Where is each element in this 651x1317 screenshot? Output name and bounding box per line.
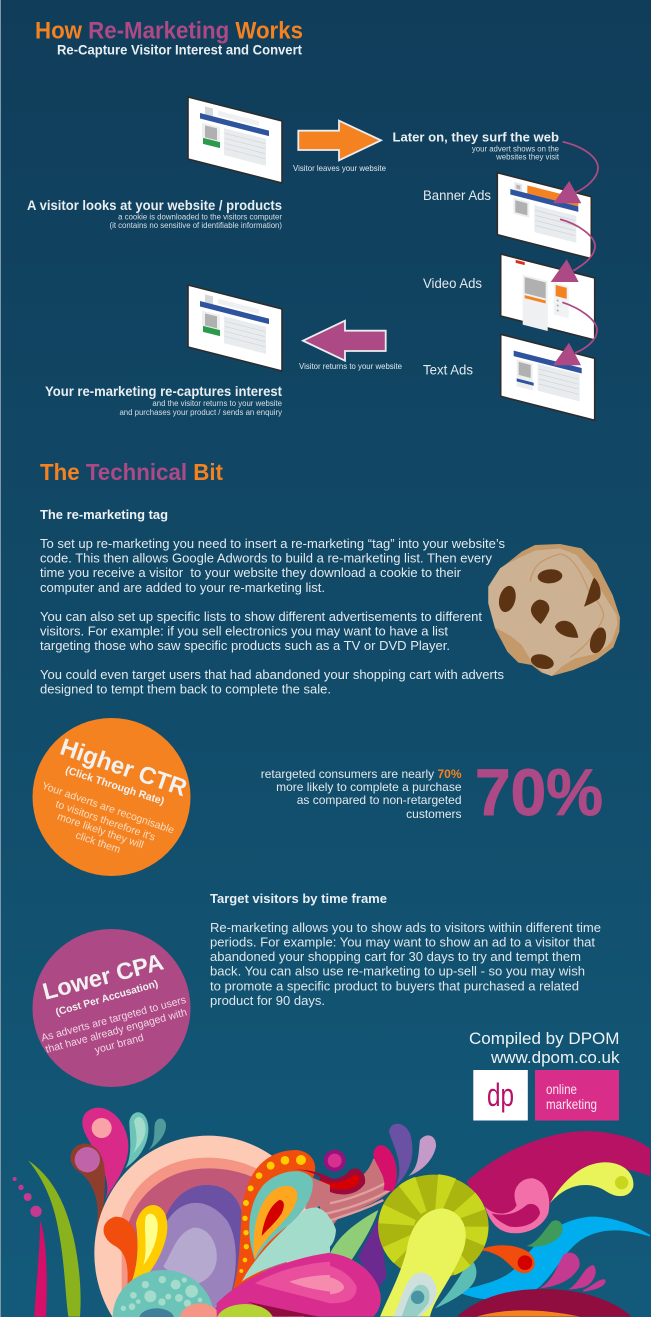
connector curves and pointers [551, 142, 598, 365]
panel: recapture [45, 261, 402, 417]
browser window: video ads [501, 230, 595, 364]
caption: recaptures interest: and the visitor returns to your website [152, 399, 282, 408]
badge: higher CTR: (Click Through Rate) [64, 764, 166, 808]
caption: visitor looks: A visitor looks at your website / products [27, 198, 282, 213]
badge: higher CTR [32, 718, 190, 876]
browser window: return visit [188, 261, 282, 395]
text block: time frame explanation: abandoned your shopping cart for 30 days to try and tempt them [210, 950, 581, 964]
illustration: colourful swirls [13, 1108, 650, 1317]
credit: www.dpom.co.uk [490, 1048, 620, 1067]
text block: re-marketing tag explanation: designed to tempt them back to complete the sale. [40, 683, 331, 697]
text block: re-marketing tag explanation: visitors. For example: if you sell electronics you may want to have a list [40, 625, 449, 639]
credit [469, 1029, 620, 1067]
badge: higher CTR: Higher CTR [57, 734, 190, 802]
badge: higher CTR: to visitors therefore it's [54, 798, 157, 844]
sub text: adverts shown [472, 145, 560, 162]
text block: re-marketing tag explanation: targeting those who saw specific products such as a TV or DVD Player. [40, 639, 450, 653]
badge: lower CPA: (Cost Per Accusation) [55, 979, 159, 1018]
text block: time frame explanation: to promote a specific product to buyers that purchased a related [210, 980, 579, 994]
badge: lower CPA: Lower CPA [40, 949, 166, 1005]
swirls: left side [13, 1108, 330, 1317]
stat number: 70%: 70% [475, 755, 603, 829]
text block: time frame explanation: periods. For example: You may want to show an ad to a visitor that [210, 936, 596, 950]
text block: re-marketing tag explanation: To set up re-marketing you need to insert a re-marketing “tag” into your website’s [40, 537, 505, 551]
caption: recaptures interest: Your re-marketing re-captures interest [45, 384, 282, 399]
badge: higher CTR: Your adverts are recognisable [40, 780, 176, 837]
text block: re-marketing tag explanation [40, 537, 505, 697]
label: visitor returns: Visitor returns to your website [299, 361, 402, 371]
stat text: 70 percent: retargeted consumers are nearly 70% [261, 767, 462, 781]
logo: dp online marketing: dp [487, 1077, 514, 1113]
label: text ads: Text Ads [423, 362, 473, 378]
logo: dp online marketing: online [546, 1081, 577, 1097]
subtitle: Re-Capture Visitor Interest and Convert [57, 42, 302, 58]
logo: dp online marketing: marketing [546, 1096, 597, 1112]
sub text: adverts shown: websites they visit [495, 153, 560, 162]
badge: lower CPA: your brand [93, 1032, 145, 1056]
text block: time frame explanation: Re-marketing allows you to show ads to visitors within different time [210, 921, 601, 935]
label: video ads: Video Ads [423, 275, 482, 291]
text block: re-marketing tag explanation: code. This then allows Google Adwords to build a re-marketing list. Then every [40, 552, 493, 566]
stat text: 70 percent: more likely to complete a purchase [276, 780, 462, 794]
badge: lower CPA: that have already engaged with [44, 1006, 188, 1056]
text block: re-marketing tag explanation: computer and are added to your re-marketing list. [40, 581, 325, 595]
subheading: re-marketing tag: The re-marketing tag [40, 508, 168, 522]
text block: time frame explanation: product for 90 days. [210, 994, 325, 1008]
text block: time frame explanation [210, 921, 601, 1008]
caption: visitor looks [27, 198, 282, 230]
arrow: visitor leaves [298, 121, 381, 160]
logo: dp online marketing [473, 1070, 619, 1120]
caption: recaptures interest: and purchases your product / sends an enquiry [119, 408, 282, 417]
credit: Compiled by DPOM [469, 1029, 620, 1048]
text block: re-marketing tag explanation: You could even target users that had abandoned your shopping cart with adverts [40, 668, 504, 682]
heading: later on: Later on, they surf the web [392, 130, 559, 145]
stat text: 70 percent: as compared to non-retargeted [297, 793, 462, 807]
browser window: banner ads [497, 149, 591, 283]
caption: recaptures interest [45, 384, 282, 417]
caption: visitor looks: a cookie is downloaded to the visitors computer [118, 212, 282, 222]
text block: re-marketing tag explanation: time you receive a visitor to your website they download a cookie to their [40, 566, 461, 580]
label: banner ads: Banner Ads [423, 187, 491, 203]
stat text: 70 percent [261, 767, 462, 821]
subheading: target visitors: Target visitors by time frame [210, 892, 387, 906]
badge: higher CTR: more likely they will [56, 811, 145, 851]
badge: higher CTR: click them [74, 829, 122, 856]
browser window: your website [188, 73, 282, 207]
icon: cookie [488, 544, 620, 676]
badge: lower CPA: As adverts are targeted to users [40, 994, 187, 1044]
panel: surfing the web [392, 130, 598, 444]
sub text: adverts shown: your advert shows on the [472, 145, 559, 154]
label: visitor leaves: Visitor leaves your website [293, 163, 386, 173]
panel: website visit [27, 73, 386, 230]
heading: the technical bit: The Technical Bit [40, 459, 223, 485]
title: How Re-Marketing Works [35, 18, 303, 44]
browser window: text ads [501, 310, 595, 444]
caption: visitor looks: (it contains no sensitive of identifiable information) [110, 221, 282, 230]
badge: lower CPA [32, 929, 190, 1087]
text block: re-marketing tag explanation: You can also set up specific lists to show different advertisements to different [40, 610, 483, 624]
arrow: visitor returns [303, 321, 386, 361]
swirls: right side [313, 1124, 650, 1317]
stat text: 70 percent: customers [406, 807, 462, 821]
text block: time frame explanation: back. You can also use re-marketing to up-sell - so you may wish [210, 965, 585, 979]
